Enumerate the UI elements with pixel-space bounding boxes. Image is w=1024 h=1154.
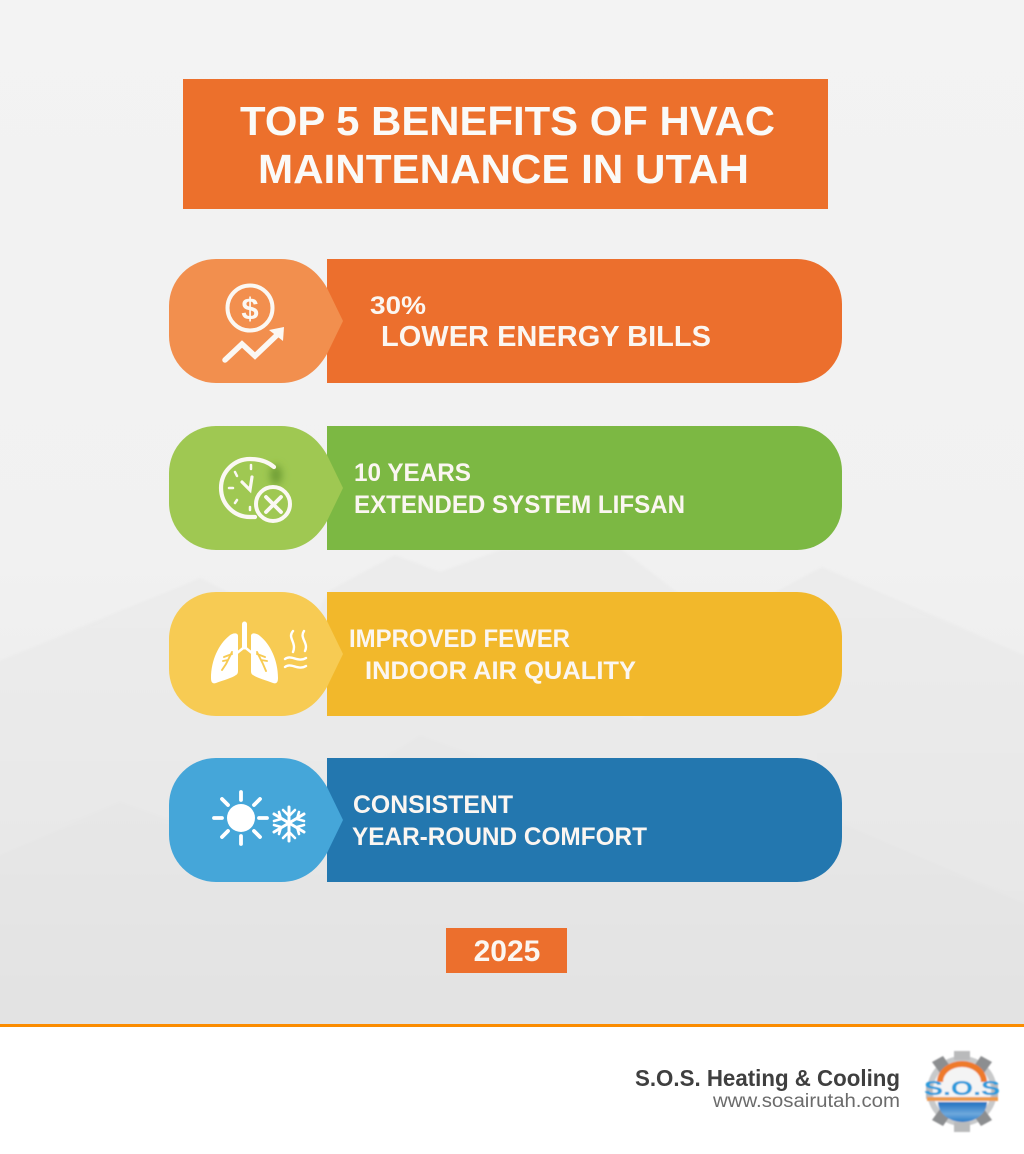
text: benefit two — [354, 459, 685, 519]
icon: dollar coin and rising arrow — [225, 286, 284, 360]
text: benefit three: IMPROVED FEWER — [349, 625, 570, 653]
icon: dollar coin and rising arrow: $ — [241, 291, 259, 326]
logo: S.O.S gear — [924, 1051, 1000, 1132]
title banner: TOP 5 BENEFITS OF HVAC — [240, 98, 775, 144]
website: www.sosairutah.com — [712, 1091, 900, 1112]
icon: clock with x badge — [221, 459, 290, 521]
year badge — [446, 928, 567, 973]
text: benefit three — [349, 625, 636, 685]
icon: sun and snowflake — [214, 792, 304, 844]
icon tab: orange — [169, 259, 343, 383]
text: benefit one: 30% — [370, 292, 426, 320]
text: benefit four: CONSISTENT — [353, 791, 513, 819]
panel: indoor air quality — [169, 592, 842, 716]
title banner: MAINTENANCE IN UTAH — [258, 146, 749, 192]
icon tab: yellow — [169, 592, 343, 716]
text: benefit two: 10 YEARS — [354, 459, 471, 487]
panel: extended system lifespan — [169, 426, 842, 550]
company name: S.O.S. Heating & Cooling — [635, 1065, 900, 1091]
panel: lower energy bills — [169, 259, 842, 383]
bar: yellow — [327, 592, 842, 716]
bar: blue — [327, 758, 842, 882]
panel: year-round comfort — [169, 758, 842, 882]
text: benefit four: YEAR-ROUND COMFORT — [352, 823, 647, 851]
year badge: 2025 — [474, 935, 540, 968]
icon tab: green — [169, 426, 343, 550]
bar: green — [327, 426, 842, 550]
title banner — [183, 79, 828, 209]
logo: S.O.S gear: S.O.S — [924, 1078, 1000, 1100]
text: benefit one: LOWER ENERGY BILLS — [381, 321, 711, 353]
text: benefit two: EXTENDED SYSTEM LIFSAN — [354, 491, 685, 519]
bar: orange — [327, 259, 842, 383]
text: benefit four — [352, 791, 647, 851]
footer — [0, 1024, 1024, 1154]
text: benefit three: INDOOR AIR QUALITY — [365, 657, 636, 685]
icon tab: blue — [169, 758, 343, 882]
icon: lungs and air — [211, 624, 306, 683]
text: benefit one — [370, 292, 711, 353]
